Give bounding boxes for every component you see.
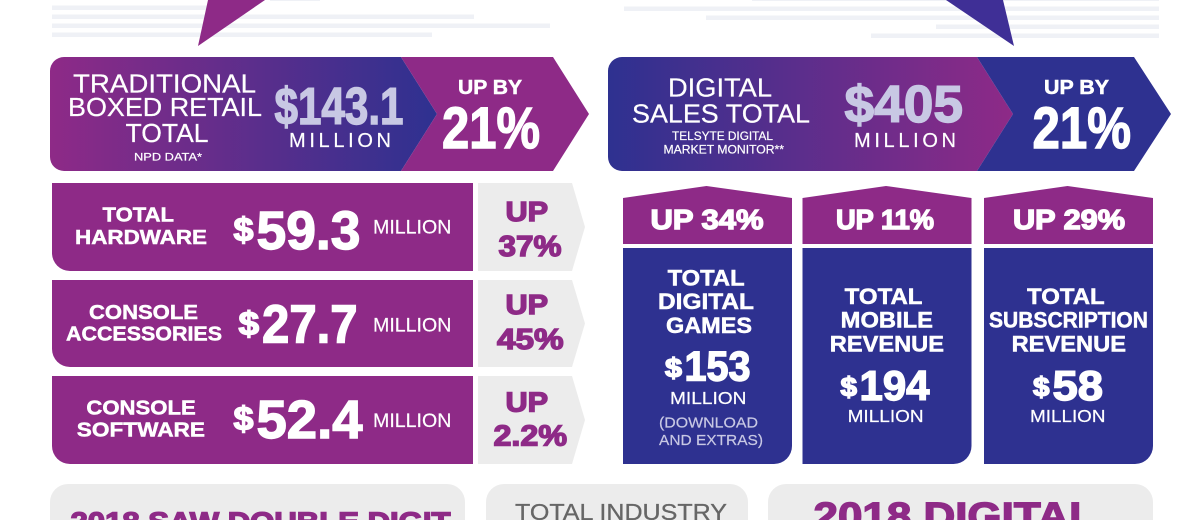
row: total hardware: HARDWARE [75, 226, 207, 249]
card: total mobile revenue [802, 248, 972, 464]
card: total subscription revenue: $ [1033, 372, 1050, 402]
card: total mobile revenue: 194 [860, 362, 930, 409]
row: console accessories [52, 280, 473, 367]
row: console software: MILLION [373, 410, 451, 432]
card: total digital games: MILLION [670, 388, 746, 408]
arrow: up by 21 percent digital: UP BY [1044, 77, 1110, 99]
card header: up 34 percent [623, 186, 792, 244]
card: total subscription revenue: MILLION [1030, 406, 1106, 426]
panel: double digit growth note [50, 484, 465, 520]
arrow: up 37 percent: 37% [498, 231, 562, 263]
arrow: up 45 percent: UP [506, 289, 548, 320]
arrow: up by 21 percent: 21% [442, 96, 540, 161]
panel: digital sales total banner [608, 57, 1171, 171]
card header: up 11 percent: UP 11% [836, 204, 934, 235]
arrow: up 2.2 percent: UP [506, 387, 548, 418]
card: total digital games: $ [665, 353, 682, 383]
card: total mobile revenue: $ [840, 372, 857, 402]
card header: up 29 percent [984, 186, 1153, 244]
card: total subscription revenue: TOTAL [1027, 284, 1105, 309]
card: total digital games: 153 [684, 343, 750, 390]
figure: 143.1 million: $143.1 [274, 78, 404, 136]
arrow: up 37 percent: UP [506, 196, 548, 227]
row: console software [52, 376, 473, 464]
figure: 405 million: MILLION [854, 130, 956, 152]
row: total hardware: $ [234, 211, 254, 248]
heading: traditional boxed retail total: TOTAL [126, 118, 208, 148]
card: total subscription revenue: SUBSCRIPTION [989, 308, 1148, 333]
heading: traditional boxed retail total: BOXED RETAIL [68, 92, 262, 122]
row: console software: SOFTWARE [77, 419, 205, 442]
figure: 143.1 million [274, 78, 404, 152]
card header: up 11 percent [802, 186, 972, 244]
row: total hardware: TOTAL [102, 204, 174, 227]
row: total hardware: 59.3 [256, 201, 360, 261]
panel: traditional boxed retail total banner [50, 57, 589, 171]
arrow: up 45 percent [478, 280, 585, 367]
card header: up 34 percent: UP 34% [650, 204, 764, 235]
row: console accessories: MILLION [373, 315, 451, 337]
figure: 405 million: $405 [844, 76, 963, 134]
card: total digital games: GAMES [666, 313, 752, 338]
heading: traditional boxed retail total: NPD DATA* [134, 152, 203, 164]
row: console accessories: ACCESSORIES [66, 323, 222, 346]
card: total mobile revenue: MOBILE [841, 308, 933, 333]
card: total subscription revenue: REVENUE [1012, 332, 1126, 357]
row: console accessories: CONSOLE [89, 301, 198, 324]
panel: total industry note [486, 484, 748, 520]
arrow: up by 21 percent [401, 57, 589, 171]
heading: digital sales total: MARKET MONITOR** [664, 145, 785, 157]
arrow: up by 21 percent: UP BY [458, 77, 523, 99]
card: total subscription revenue: 58 [1052, 362, 1103, 409]
arrow: up 2.2 percent [478, 376, 585, 464]
heading: traditional boxed retail total [68, 69, 262, 164]
card: total digital games: DIGITAL [658, 289, 754, 314]
arrow: up 37 percent [478, 183, 585, 271]
right callout pointer [946, 0, 1014, 46]
card: total digital games: AND EXTRAS) [659, 432, 763, 449]
heading: digital sales total [632, 73, 810, 157]
card: total mobile revenue: TOTAL [845, 284, 922, 309]
arrow: up by 21 percent digital [977, 57, 1171, 171]
arrow: up 45 percent: 45% [497, 324, 564, 356]
left callout pointer [198, 0, 265, 46]
card: total mobile revenue: MILLION [848, 406, 924, 426]
panel: 2018 digital note [768, 484, 1153, 520]
row: console accessories: $ [238, 305, 259, 342]
row: total hardware [52, 183, 473, 271]
heading: digital sales total: SALES TOTAL [632, 99, 810, 129]
card: total mobile revenue: REVENUE [830, 332, 944, 357]
card: total digital games: (DOWNLOAD [659, 415, 758, 432]
heading: digital sales total: DIGITAL [668, 73, 772, 103]
arrow: up 2.2 percent: 2.2% [494, 421, 567, 453]
heading: traditional boxed retail total: TRADITIONAL [73, 69, 256, 99]
figure: 143.1 million: MILLION [289, 130, 391, 152]
row: console software: $ [234, 400, 254, 437]
row: console software: 52.4 [256, 390, 362, 450]
heading: digital sales total: TELSYTE DIGITAL [672, 131, 774, 143]
card: total subscription revenue [984, 248, 1153, 464]
row: total hardware: MILLION [373, 216, 451, 238]
card: total digital games: TOTAL [668, 266, 745, 291]
row: console accessories: 27.7 [262, 295, 358, 355]
card header: up 29 percent: UP 29% [1013, 204, 1125, 235]
arrow: up by 21 percent digital: 21% [1032, 96, 1131, 161]
row: console software: CONSOLE [86, 397, 196, 420]
card: total digital games [623, 248, 792, 464]
